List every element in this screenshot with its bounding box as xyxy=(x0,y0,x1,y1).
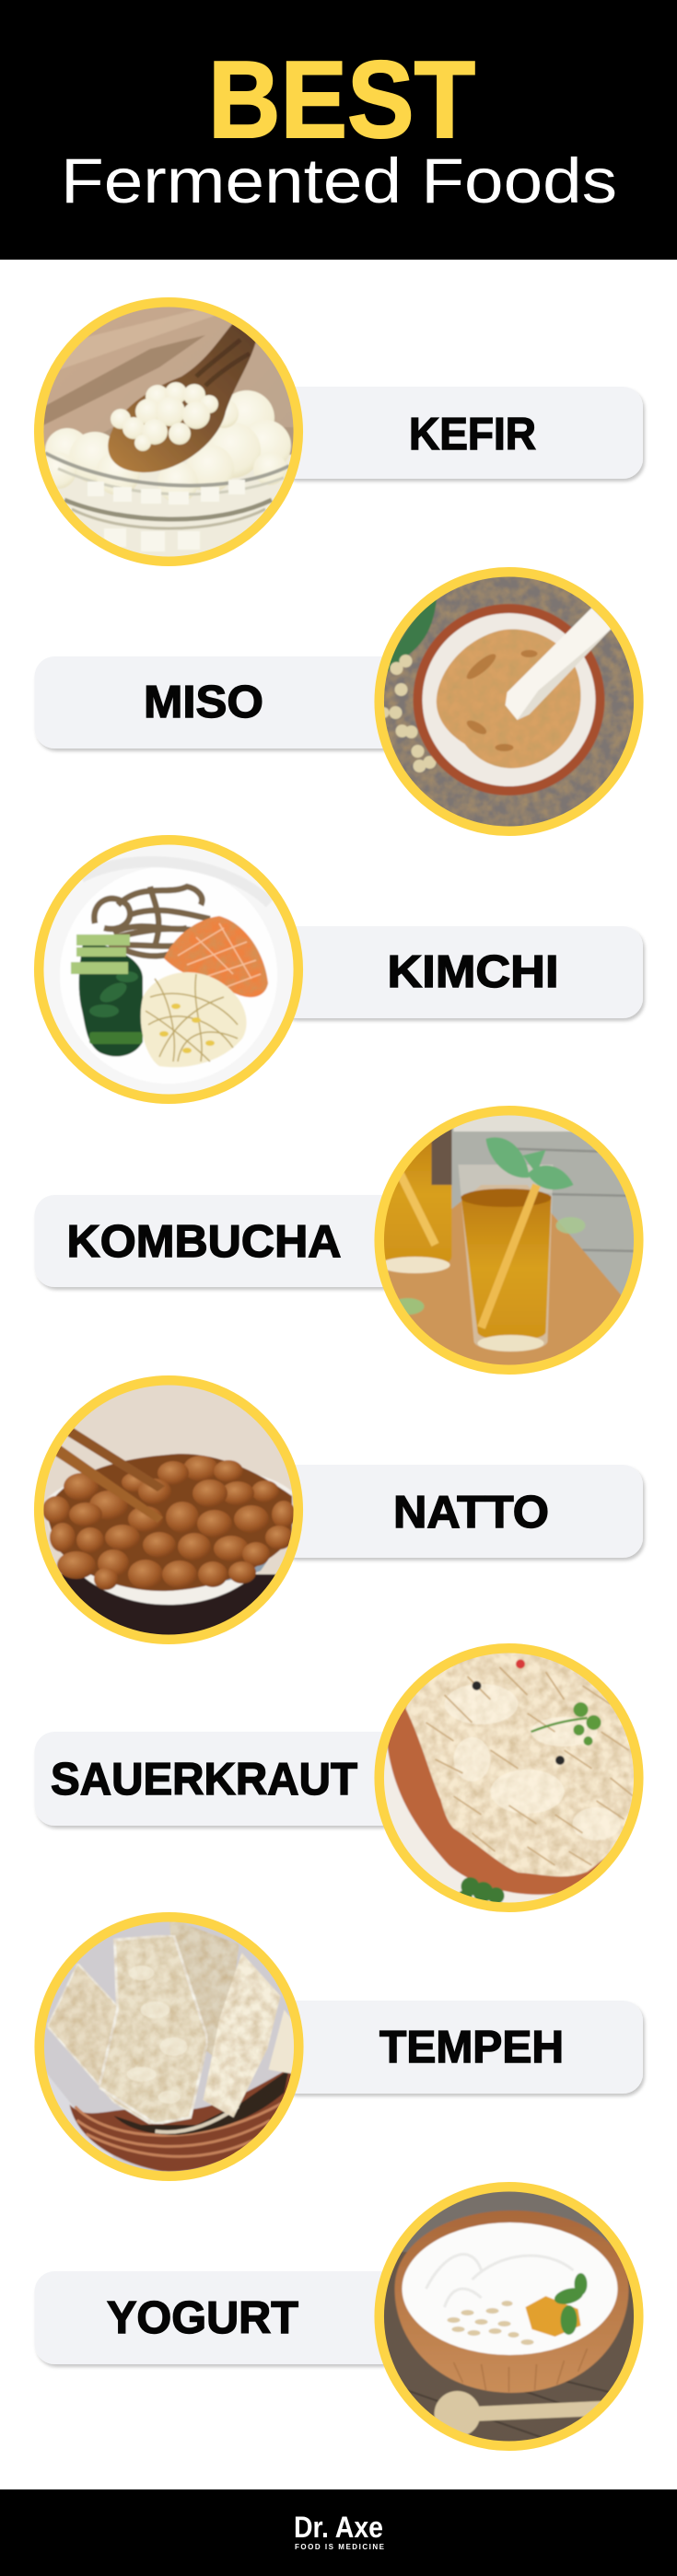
photo ring xyxy=(39,1380,298,1640)
photo: kombucha glasses xyxy=(378,1111,637,1369)
photo: kimchi bowl xyxy=(40,841,298,1098)
lime slices xyxy=(399,1298,425,1315)
label pill xyxy=(35,656,402,748)
panel: tempeh xyxy=(40,1917,643,2176)
label: KOMBUCHA: KOMBUCHA xyxy=(66,1217,341,1267)
sprouts xyxy=(141,972,247,1067)
mint xyxy=(553,2273,588,2335)
carrot xyxy=(164,916,268,997)
panel: sauerkraut xyxy=(35,1648,638,1908)
wooden bowl xyxy=(394,2210,628,2393)
miso paste xyxy=(437,629,581,768)
spinach xyxy=(79,937,143,1056)
basket interior xyxy=(114,2070,289,2135)
label: SAUERKRAUT: SAUERKRAUT xyxy=(51,1755,357,1804)
panel: natto xyxy=(39,1380,643,1640)
label pill xyxy=(35,1732,402,1826)
photo ring xyxy=(40,1917,298,2176)
photo ring xyxy=(379,1648,638,1908)
label: KEFIR: KEFIR xyxy=(409,410,536,459)
plate xyxy=(45,1465,292,1605)
pestle xyxy=(505,608,612,720)
label: YOGURT: YOGURT xyxy=(107,2293,298,2343)
panel: miso xyxy=(35,572,638,831)
cutting board xyxy=(379,1185,634,1369)
dark base xyxy=(61,1573,276,1635)
label pill xyxy=(276,926,643,1018)
glass bowl xyxy=(45,453,289,485)
label pill xyxy=(35,1195,402,1287)
photo: miso bowl xyxy=(378,573,637,830)
footer band xyxy=(0,2489,677,2576)
noodles xyxy=(94,887,210,956)
beans xyxy=(42,1456,296,1590)
basket xyxy=(70,2065,295,2172)
greens stems xyxy=(71,934,130,974)
chopsticks xyxy=(62,1425,165,1491)
soybeans xyxy=(378,655,437,772)
wooden spoon xyxy=(435,2391,601,2437)
bowl xyxy=(413,604,604,795)
mint xyxy=(486,1137,573,1189)
title: BEST: BEST xyxy=(208,39,475,161)
photo ring xyxy=(39,302,298,562)
photo: sauerkraut bowl xyxy=(379,1649,637,1907)
piles xyxy=(40,390,291,503)
photo: natto with chopsticks xyxy=(40,1381,298,1639)
panel: kimchi xyxy=(39,840,643,1099)
yogurt surface xyxy=(402,2222,617,2355)
label: MISO: MISO xyxy=(144,678,263,727)
parsley sprig xyxy=(531,1702,601,1746)
logo tagline: FOOD IS MEDICINE xyxy=(295,2543,385,2551)
left slab xyxy=(48,1964,169,2124)
front glass xyxy=(459,1165,553,1352)
logo: Dr. Axe: Dr. Axe xyxy=(294,2511,383,2544)
peppercorns xyxy=(472,1681,481,1690)
right slab xyxy=(203,1953,280,2118)
back glass xyxy=(383,1142,453,1262)
honeycomb xyxy=(525,2296,580,2337)
parsley xyxy=(457,1877,505,1905)
panel: kefir xyxy=(39,302,643,562)
kraut xyxy=(405,1649,637,1876)
subtitle: Fermented Foods: Fermented Foods xyxy=(61,145,617,216)
label: TEMPEH: TEMPEH xyxy=(379,2023,564,2072)
label: KIMCHI: KIMCHI xyxy=(387,947,558,997)
bean mass xyxy=(45,1454,292,1591)
leaf xyxy=(388,600,437,672)
label pill xyxy=(35,2271,402,2364)
panel: kombucha xyxy=(35,1110,638,1370)
label pill xyxy=(276,1465,643,1558)
header band xyxy=(0,0,677,260)
photo ring xyxy=(379,1110,638,1370)
spoon xyxy=(108,323,257,472)
photo: tempeh in basket xyxy=(41,1918,298,2176)
oats xyxy=(448,2301,534,2345)
label: NATTO: NATTO xyxy=(393,1488,549,1537)
back slab xyxy=(169,1918,239,2065)
photo: kefir in spoon xyxy=(40,303,298,561)
label pill xyxy=(276,2001,643,2094)
kefir clump on spoon xyxy=(111,382,218,451)
photo: yogurt bowl xyxy=(379,2187,637,2445)
label pill xyxy=(276,387,643,479)
photo ring xyxy=(379,572,638,831)
photo ring xyxy=(379,2187,638,2446)
photo ring xyxy=(39,840,298,1099)
terracotta bowl xyxy=(387,1705,610,1896)
panel: yogurt xyxy=(35,2187,638,2446)
center slab xyxy=(99,1935,208,2124)
